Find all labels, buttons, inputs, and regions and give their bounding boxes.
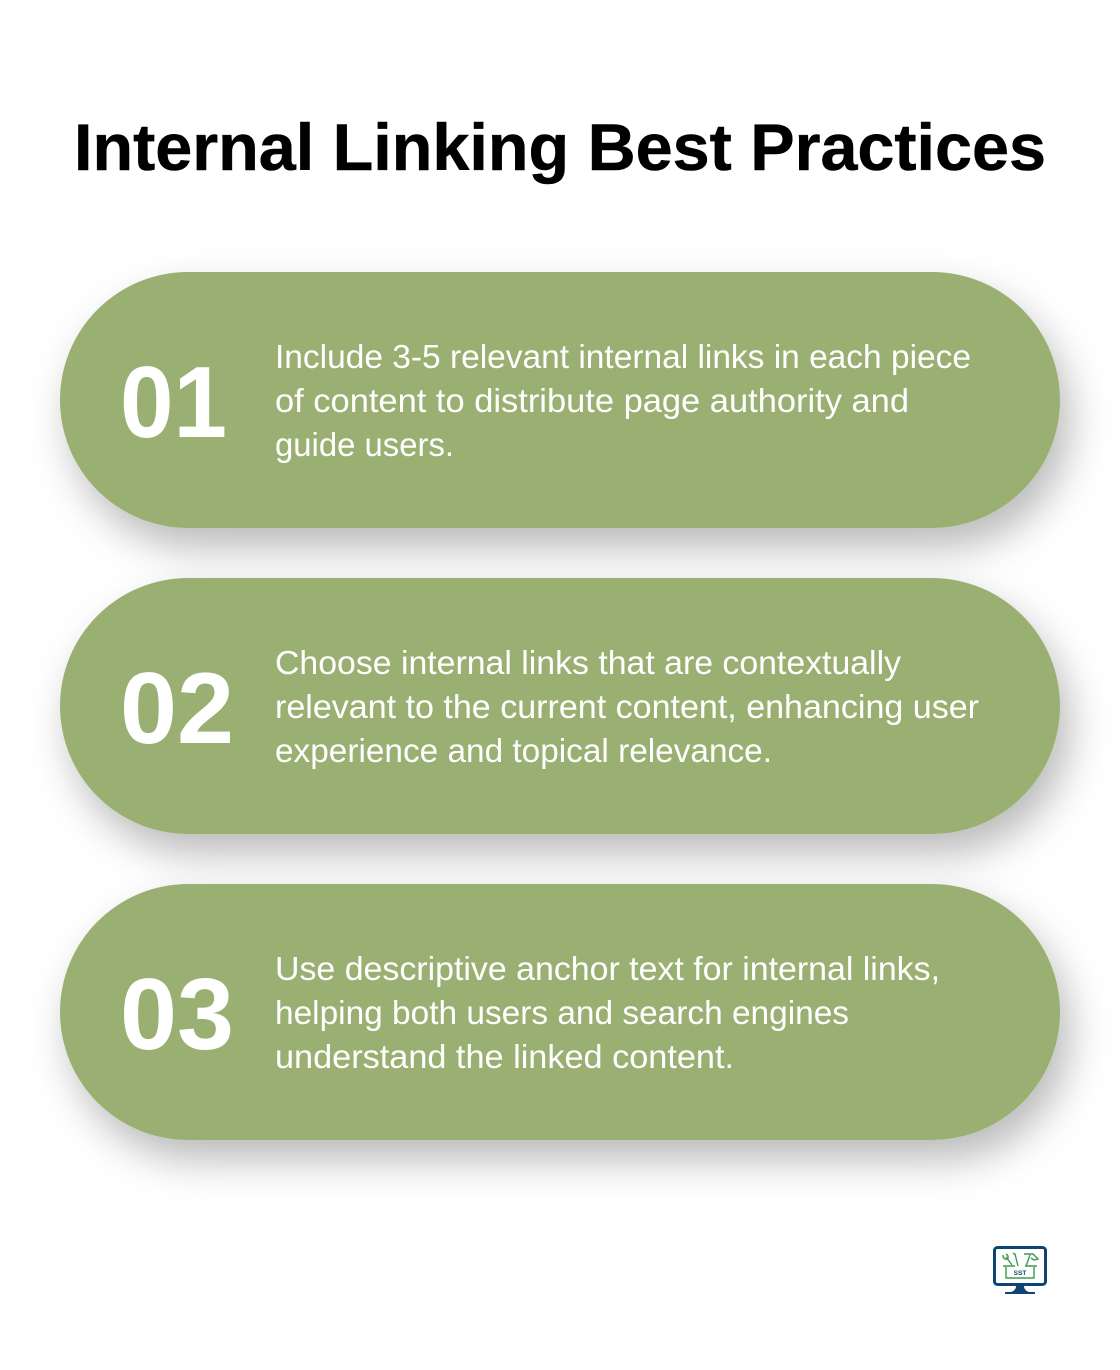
- number 02: 02: [120, 653, 234, 765]
- text block 01: [275, 338, 971, 463]
- text block 01: of content to distribute page authority and: [275, 382, 909, 419]
- text block 02: experience and topical relevance.: [275, 732, 772, 769]
- pill background 01: [60, 272, 1060, 528]
- panel: step 03: [60, 884, 1060, 1140]
- toolbox and tools: [1003, 1253, 1038, 1278]
- text block 03: helping both users and search engines: [275, 994, 849, 1031]
- SST label: SST: [1014, 1270, 1026, 1277]
- text block 01: Include 3-5 relevant internal links in each piece: [275, 338, 971, 375]
- text block 03: [275, 950, 940, 1075]
- title: Internal Linking Best Practices: [74, 110, 1046, 184]
- monitor: [994, 1248, 1046, 1284]
- text block 03: Use descriptive anchor text for internal links,: [275, 950, 940, 987]
- pill background 03: [60, 884, 1060, 1140]
- number 03: 03: [120, 959, 234, 1071]
- panel: step 01: [60, 272, 1060, 528]
- text block 02: [275, 644, 979, 769]
- number 01: 01: [120, 347, 227, 459]
- text block 03: understand the linked content.: [275, 1038, 734, 1075]
- panel: step 02: [60, 578, 1060, 834]
- text block 02: Choose internal links that are contextually: [275, 644, 902, 681]
- text block 01: guide users.: [275, 426, 454, 463]
- text block 02: relevant to the current content, enhancing user: [275, 688, 979, 725]
- pill background 02: [60, 578, 1060, 834]
- icon: monitor with toolbox logo: [994, 1248, 1046, 1294]
